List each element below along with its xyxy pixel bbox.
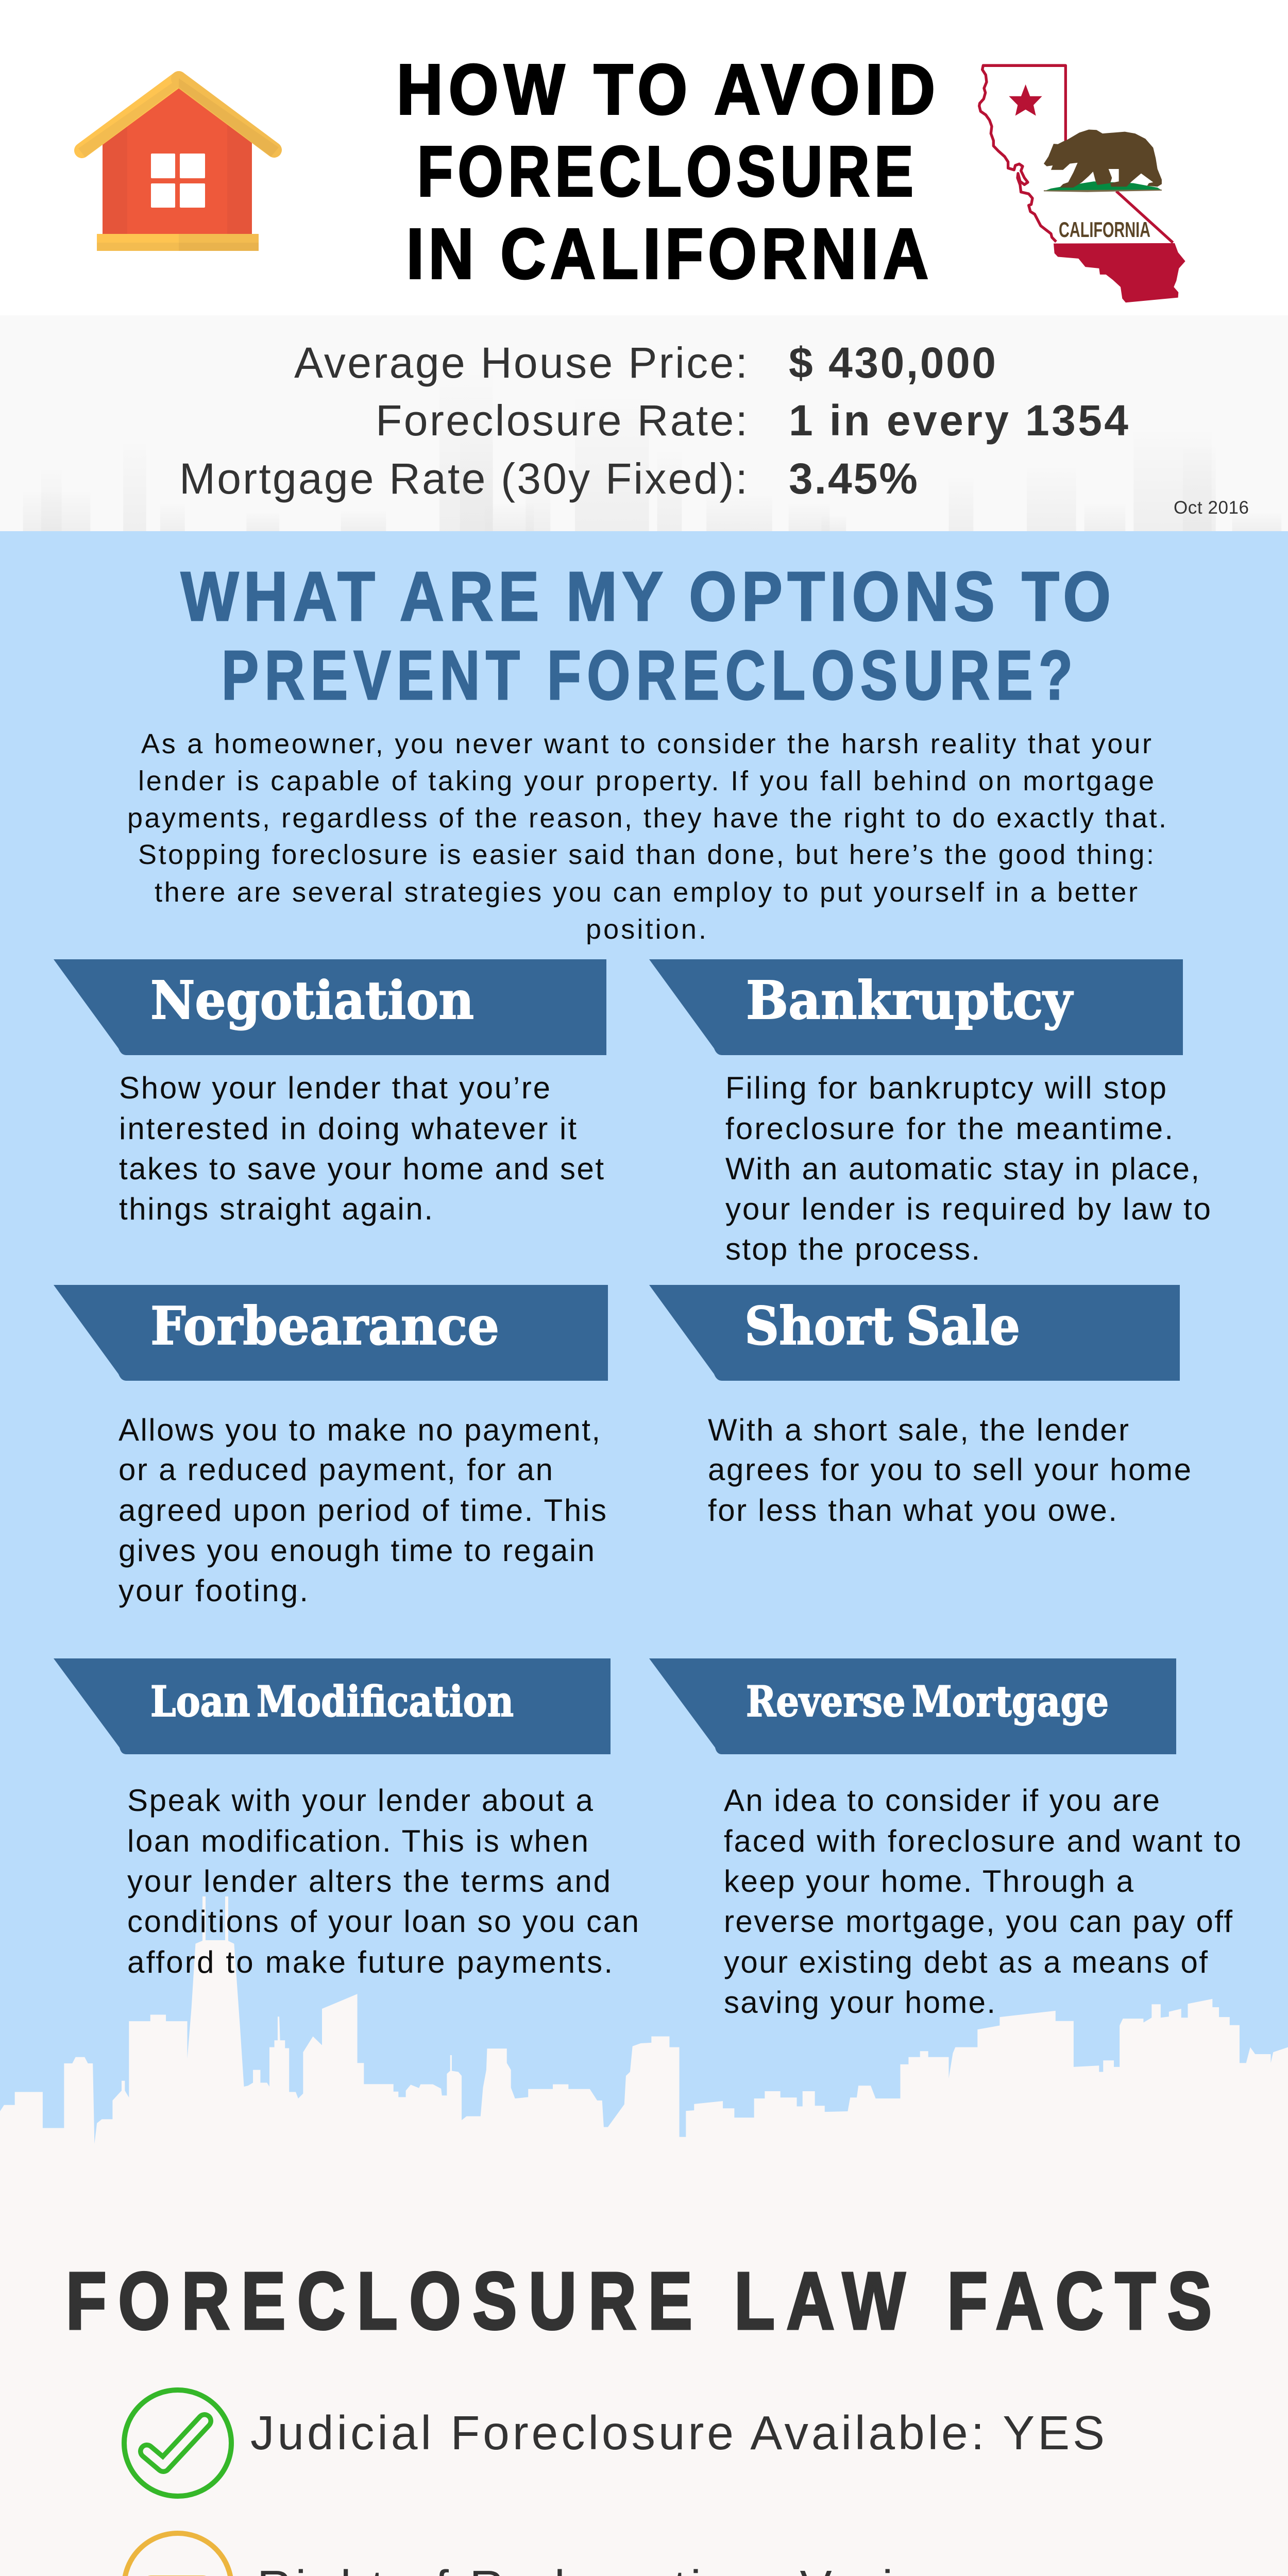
title xyxy=(397,49,935,294)
text: loan modification description: Speak with your lender about a xyxy=(127,1783,594,1818)
text: bankruptcy description: foreclosure for the meantime. xyxy=(725,1111,1173,1146)
text: forbearance description: your footing. xyxy=(118,1573,308,1608)
panel: state statistics xyxy=(0,315,1288,532)
text: reverse mortgage description: saving your home. xyxy=(724,1985,995,2020)
stat: foreclosure rate xyxy=(376,396,1128,445)
banner: short sale xyxy=(649,1285,1180,1381)
panel: reverse mortgage xyxy=(649,1658,1241,2020)
icon: green check xyxy=(124,2390,231,2496)
title: IN CALIFORNIA xyxy=(406,214,928,294)
panel: options background with skyline xyxy=(0,531,1288,2163)
text: loan modification description: conditions of your loan so you can xyxy=(127,1904,639,1939)
text: reverse mortgage description: keep your home. Through a xyxy=(724,1864,1134,1899)
icon: house xyxy=(78,78,279,251)
text block: introduction: As a homeowner, you never want to consider the harsh reality that your xyxy=(141,728,1151,759)
panel: header xyxy=(78,49,1185,302)
banner: bankruptcy: Bankruptcy xyxy=(746,970,1074,1031)
banner: forbearance xyxy=(54,1285,608,1381)
text: reverse mortgage description: An idea to consider if you are xyxy=(724,1783,1160,1818)
panel: negotiation xyxy=(54,959,606,1226)
panel: loan modification xyxy=(54,1658,639,1979)
banner: loan modification xyxy=(54,1658,611,1754)
stat: average house price xyxy=(294,338,996,387)
text: forbearance description xyxy=(118,1413,606,1608)
stat: mortgage rate: Mortgage Rate (30y Fixed): xyxy=(179,454,748,503)
banner: loan modification: Loan Modification xyxy=(150,1677,514,1726)
stat: foreclosure rate: Foreclosure Rate: xyxy=(376,396,748,445)
stat: average house price: Average House Price: xyxy=(294,338,748,387)
text: negotiation description: interested in doing whatever it xyxy=(119,1111,577,1146)
fact: judicial foreclosure xyxy=(124,2390,1105,2496)
banner: reverse mortgage: Reverse Mortgage xyxy=(746,1677,1109,1726)
text: forbearance description: gives you enough time to regain xyxy=(118,1533,595,1568)
text: loan modification description xyxy=(127,1783,639,1979)
fact: judicial foreclosure: Judicial Foreclosure Available: YES xyxy=(250,2406,1105,2460)
panel: short sale xyxy=(649,1285,1191,1528)
icon: California flag map xyxy=(979,65,1185,302)
banner: forbearance: Forbearance xyxy=(150,1295,499,1357)
date note: Oct 2016 xyxy=(1174,498,1249,518)
banner: short sale: Short Sale xyxy=(744,1295,1020,1357)
stat: foreclosure rate: 1 in every 1354 xyxy=(789,396,1128,445)
text: reverse mortgage description xyxy=(724,1783,1241,2020)
text: reverse mortgage description: faced with foreclosure and want to xyxy=(724,1824,1241,1858)
text: forbearance description: agreed upon period of time. This xyxy=(118,1493,606,1528)
panel: bankruptcy xyxy=(649,959,1211,1266)
text: forbearance description: or a reduced payment, for an xyxy=(118,1452,553,1487)
text: loan modification description: loan modification. This is when xyxy=(127,1824,588,1858)
text: loan modification description: afford to make future payments. xyxy=(127,1945,613,1979)
heading: foreclosure law facts: FORECLOSURE LAW FACTS xyxy=(66,2256,1212,2346)
heading: options: PREVENT FORECLOSURE? xyxy=(222,636,1073,714)
text: negotiation description: Show your lender that you’re xyxy=(119,1071,550,1105)
icon: yellow minus xyxy=(124,2533,231,2576)
text: bankruptcy description: With an automatic stay in place, xyxy=(725,1151,1199,1186)
banner: negotiation xyxy=(54,959,606,1055)
text block: introduction: lender is capable of taking your property. If you fall behind on mortgage xyxy=(138,766,1154,796)
banner: reverse mortgage xyxy=(649,1658,1176,1754)
banner: negotiation: Negotiation xyxy=(150,970,474,1031)
heading: options: WHAT ARE MY OPTIONS TO xyxy=(181,557,1111,635)
title: HOW TO AVOID xyxy=(397,49,935,129)
text: bankruptcy description xyxy=(725,1071,1211,1266)
text: forbearance description: Allows you to make no payment, xyxy=(118,1413,600,1447)
text: reverse mortgage description: reverse mortgage, you can pay off xyxy=(724,1904,1232,1939)
text block: introduction: Stopping foreclosure is easier said than done, but here’s the good thing: xyxy=(138,839,1154,870)
title: FORECLOSURE xyxy=(417,131,913,211)
text: loan modification description: your lender alters the terms and xyxy=(127,1864,611,1899)
stat: mortgage rate: 3.45% xyxy=(789,454,918,503)
text block: introduction: position. xyxy=(586,914,706,945)
text: negotiation description: things straight again. xyxy=(119,1192,433,1226)
icon: California flag map: CALIFORNIA xyxy=(1059,217,1150,242)
text: bankruptcy description: stop the process. xyxy=(725,1232,980,1266)
text: short sale description: agrees for you to sell your home xyxy=(708,1452,1191,1487)
heading: options xyxy=(181,557,1111,714)
text: negotiation description xyxy=(119,1071,604,1226)
text block: introduction: there are several strategies you can employ to put yourself in a better xyxy=(155,877,1138,908)
text block: introduction: payments, regardless of the reason, they have the right to do exactly that. xyxy=(127,803,1166,834)
panel: forbearance xyxy=(54,1285,608,1608)
text: negotiation description: takes to save your home and set xyxy=(119,1151,604,1186)
text: short sale description xyxy=(708,1413,1191,1528)
stat: average house price: $ 430,000 xyxy=(789,338,996,387)
text: bankruptcy description: Filing for bankruptcy will stop xyxy=(725,1071,1166,1105)
text: short sale description: for less than what you owe. xyxy=(708,1493,1117,1528)
fact: right of redemption xyxy=(124,2533,951,2576)
text: bankruptcy description: your lender is required by law to xyxy=(725,1192,1211,1226)
text: reverse mortgage description: your existing debt as a means of xyxy=(724,1945,1208,1979)
text block: introduction xyxy=(127,728,1166,945)
banner: bankruptcy xyxy=(649,959,1183,1055)
text: short sale description: With a short sale, the lender xyxy=(708,1413,1129,1447)
